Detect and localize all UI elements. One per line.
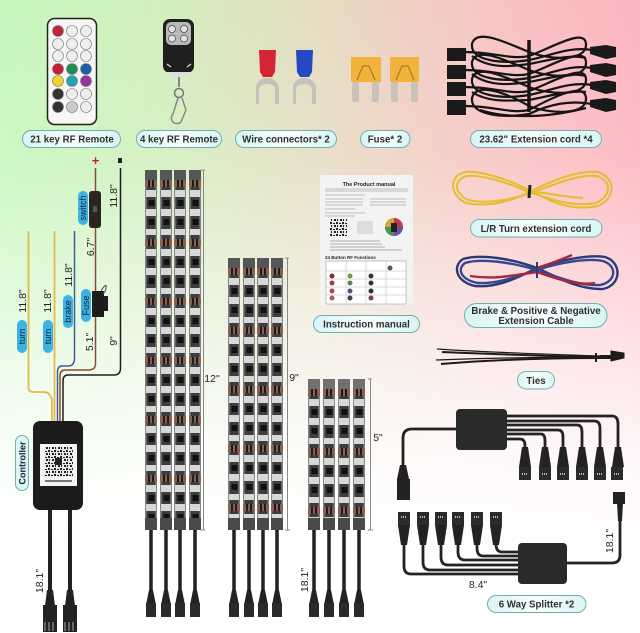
label: switch: switch <box>78 195 88 221</box>
LED strips 12 inch <box>145 170 201 617</box>
LED strips 9 inch <box>228 258 283 617</box>
dimension: 8.4: 8.4" <box>469 579 487 591</box>
dimension: 9 inch: 9" <box>289 372 299 384</box>
label: L/R Turn extension cord <box>470 220 602 237</box>
label: brake: brake <box>63 300 73 323</box>
label: Instruction manual <box>314 316 420 332</box>
wiring harness <box>28 168 120 422</box>
label: Ties: Ties <box>526 376 546 387</box>
label: Ties <box>518 372 554 389</box>
dimension line 5 inch <box>368 379 373 530</box>
label: Fuse: Fuse <box>81 295 91 316</box>
wire: turn 2 <box>54 231 56 422</box>
label: 4 key RF Remote <box>136 130 222 148</box>
dimension: turn 11.8 second: 11.8" <box>42 289 54 313</box>
label: Wire connectors* 2: Wire connectors* 2 <box>242 134 330 146</box>
6 way splitter top <box>397 409 624 500</box>
dimension: 5 inch: 5" <box>373 432 383 444</box>
icon: yellow turn extension cable <box>453 172 612 208</box>
dimension: 18.1 strips: 18.1" <box>299 568 311 592</box>
label: Fuse* 2 <box>360 130 410 148</box>
label: Brake & Positive & Negative Extension Cable: Brake & Positive & Negative <box>471 306 601 317</box>
wire: brake <box>58 231 74 422</box>
label: Instruction manual: Instruction manual <box>323 320 410 330</box>
minus sign <box>118 158 122 163</box>
color wheel <box>385 218 403 236</box>
label: 23.62" Extension cord *4: 23.62" Extension cord *4 <box>479 134 593 146</box>
label: turn 2: turn <box>43 329 53 344</box>
wire: negative <box>63 168 120 422</box>
dimension: 6.7: 6.7" <box>85 238 97 256</box>
label: turn 1 <box>17 320 27 353</box>
LED strips 5 inch <box>308 379 365 617</box>
dimension line 9 inch <box>285 258 290 530</box>
label: L/R Turn extension cord: L/R Turn extension cord <box>481 224 591 235</box>
label: Fuse* 2: Fuse* 2 <box>368 134 402 146</box>
dimension: negative 11.8: 11.8" <box>108 184 120 208</box>
label: Fuse <box>81 289 91 322</box>
dimension: brake 11.8: 11.8" <box>63 263 75 287</box>
label: Brake & Positive & Negative Extension Cable <box>464 304 607 328</box>
icon: 21 key RF remote <box>48 18 96 124</box>
label: 6 Way Splitter *2 <box>488 596 586 612</box>
dimension: turn 11.8: 11.8" <box>17 289 29 313</box>
label: Controller <box>16 436 28 490</box>
manual subheading: 24 Button RF Functions <box>325 255 376 260</box>
icon: extension cords <box>447 37 616 116</box>
dimension: 5.1: 5.1" <box>84 333 96 351</box>
6 way splitter bottom <box>398 492 625 584</box>
label: turn 1: turn <box>17 329 27 344</box>
label: turn 2 <box>43 320 53 353</box>
wire: turn 1 <box>28 231 52 422</box>
plus sign: + <box>92 153 100 168</box>
label: 21 key RF Remote: 21 key RF Remote <box>30 134 114 146</box>
dimension line 12 inch <box>201 170 205 530</box>
label: Controller: Controller <box>18 441 28 485</box>
manual title: The Product manual <box>343 182 396 188</box>
dimension: 9: 9" <box>108 336 120 346</box>
controller <box>33 421 83 632</box>
instruction manual sheet <box>320 175 413 305</box>
label: 23.62" Extension cord *4 <box>470 130 602 148</box>
dimension: 12: 12" <box>204 373 220 385</box>
icon: fuses <box>351 57 419 102</box>
label: 4 key RF Remote: 4 key RF Remote <box>140 134 219 146</box>
label: Wire connectors* 2 <box>236 130 336 148</box>
icon: 4 key RF remote <box>163 19 194 124</box>
icon: wire connectors <box>256 50 316 104</box>
label: Brake & Positive & Negative Extension Cable: Extension Cable <box>498 316 574 327</box>
label: 6 Way Splitter *2: 6 Way Splitter *2 <box>499 600 574 610</box>
wire: positive <box>60 168 96 422</box>
dimension: 18.1 controller: 18.1" <box>34 569 46 593</box>
label: 21 key RF Remote <box>22 130 120 148</box>
label: brake <box>63 295 73 328</box>
icon: brake, positive, negative cable bundle <box>457 255 618 289</box>
icon: fuse holder <box>92 285 108 317</box>
icon: inline switch <box>89 191 101 228</box>
dimension: 18.1 splitter: 18.1" <box>604 529 616 553</box>
icon: cable ties <box>436 349 624 364</box>
